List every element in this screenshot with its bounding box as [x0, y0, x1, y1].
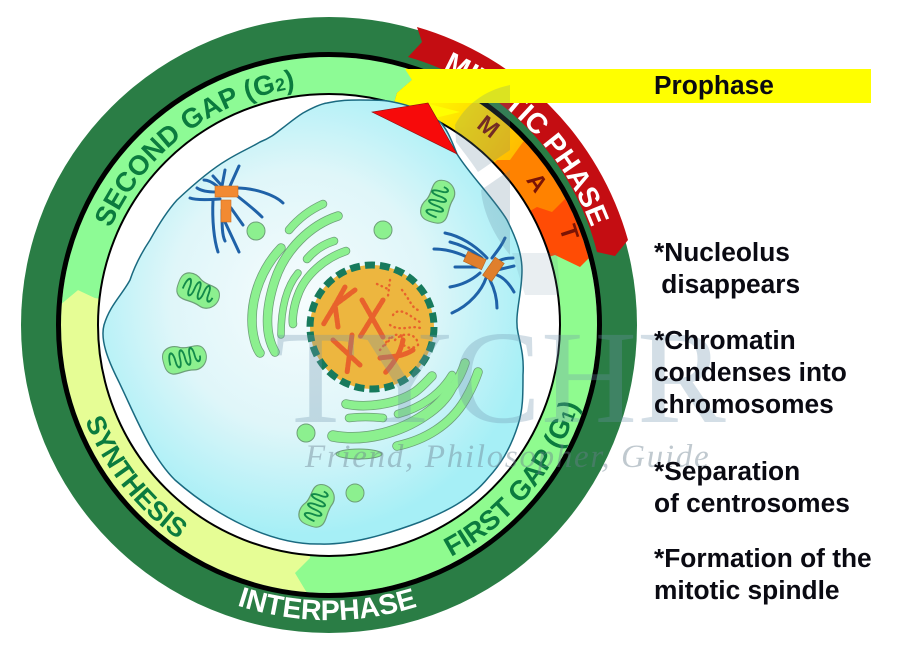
note: nucleolus: *Nucleolus disappears	[654, 237, 800, 299]
chromosomes	[323, 287, 413, 373]
red pointer triangle	[372, 103, 457, 154]
vesicles	[247, 221, 392, 502]
heading: prophase: Prophase	[654, 70, 774, 100]
note: spindle: *Formation of the mitotic spindle	[654, 543, 872, 605]
segment: telophase	[394, 68, 588, 267]
golgi lower outline and fill	[333, 363, 478, 459]
yellow prophase bar	[397, 69, 871, 118]
label: synthesis: SYNTHESIS	[87, 416, 186, 537]
segment: metaphase	[394, 68, 524, 162]
note: chromatin: *Chromatin condenses into chromosomes	[654, 325, 847, 419]
ring: black borders	[58, 54, 600, 596]
mitochondrion 2	[160, 339, 209, 377]
ring: white interior	[59, 55, 599, 595]
watermark tagline: Friend, Philosopher, Guide	[304, 439, 710, 475]
ring: phase segments	[61, 57, 597, 593]
nucleus	[310, 265, 434, 389]
segment: anaphase	[394, 68, 566, 212]
cell body	[103, 100, 523, 544]
labels: M A T: M	[472, 110, 504, 144]
centrosome left	[190, 166, 283, 252]
labels: M A T: T	[553, 221, 584, 244]
mitochondrion 3	[418, 176, 458, 226]
note: centrosomes: *Separation of centrosomes	[654, 456, 850, 518]
ring: interphase outer	[21, 17, 637, 633]
segment: first gap	[61, 57, 597, 593]
label: interphase: INTERPHASE	[238, 587, 417, 620]
watermark text: TYCHR	[275, 303, 726, 451]
label: first gap: FIRST GAP (G1)	[443, 402, 582, 556]
label: second gap: SECOND GAP (G2)	[96, 70, 294, 226]
label: mitotic phase: MITOTIC PHASE	[445, 52, 610, 226]
segment: synthesis	[61, 290, 310, 592]
mitochondrion 1	[173, 270, 224, 312]
ring: mitotic phase outer	[408, 27, 628, 256]
mitochondrion 4	[296, 480, 338, 531]
labels: M A T: A	[521, 168, 553, 198]
labels: M A T	[472, 110, 584, 244]
golgi upper outline and fill	[252, 204, 346, 353]
segment: second gap	[62, 57, 406, 304]
centrosome right	[434, 233, 514, 313]
watermark logo	[455, 85, 560, 295]
chromatin dots	[377, 280, 420, 350]
